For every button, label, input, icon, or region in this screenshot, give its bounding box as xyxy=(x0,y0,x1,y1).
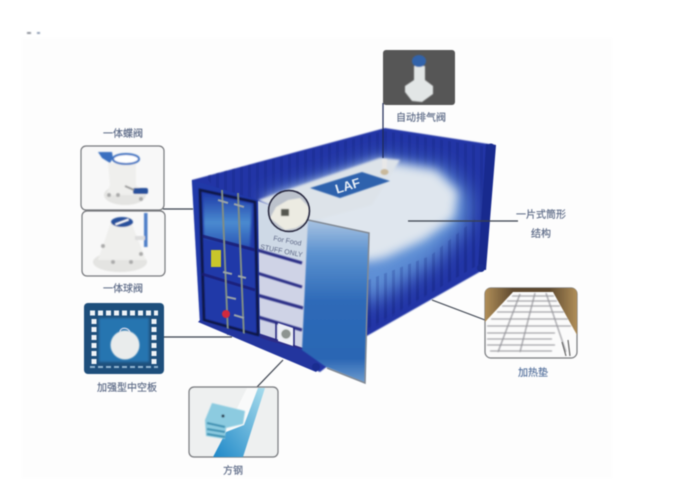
corrugated ribs upper wall xyxy=(205,131,488,330)
photo: butterfly valve xyxy=(81,146,164,210)
hazard sticker xyxy=(211,250,221,267)
closed door xyxy=(192,180,260,338)
brand label LAF xyxy=(310,172,390,198)
photo: ball valve xyxy=(82,211,165,276)
label: ball valve: 一体球阀 xyxy=(103,282,143,295)
flexitank dome xyxy=(258,158,470,305)
front tank panels xyxy=(255,200,309,350)
container shell xyxy=(192,128,495,372)
label For Food: For Food xyxy=(273,235,302,248)
front tank panels: STUFF ONLY xyxy=(259,244,303,259)
label: one-piece tube structure: 结构 xyxy=(531,227,551,240)
photo: square steel xyxy=(189,387,278,457)
label: square steel: 方钢 xyxy=(223,464,243,477)
label: reinforced hollow board: 加强型中空板 xyxy=(97,381,157,394)
container xyxy=(192,128,496,383)
red seal xyxy=(222,310,230,318)
open door xyxy=(302,220,369,383)
background panel xyxy=(22,38,612,478)
label: heating pad: 加热垫 xyxy=(518,366,548,379)
air valve on tank xyxy=(380,159,388,175)
photo: reinforced hollow board xyxy=(84,303,164,374)
label: one-piece tube structure xyxy=(516,208,566,240)
label: one-piece tube structure: 一片式筒形 xyxy=(516,208,566,221)
label: air vent valve: 自动排气阀 xyxy=(396,111,446,124)
label: butterfly valve: 一体蝶阀 xyxy=(103,127,143,140)
rear corner post xyxy=(478,144,496,270)
bottom rail xyxy=(198,320,322,372)
leader lines xyxy=(163,103,518,387)
top corner marks xyxy=(27,32,40,34)
photo: air vent valve xyxy=(383,50,455,105)
brand label LAF: LAF xyxy=(333,175,362,197)
corrugated ribs lower wall xyxy=(367,215,480,332)
photo: heating pad xyxy=(485,288,577,358)
zoom circle valve xyxy=(268,190,310,232)
